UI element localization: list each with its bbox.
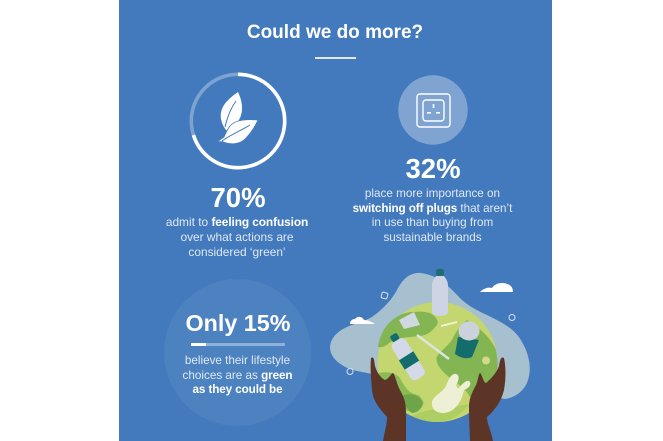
stat: only 15%: Only 15% xyxy=(186,310,290,336)
text: 70% description: admit to feeling confusion xyxy=(166,215,308,229)
title: Could we do more? xyxy=(247,22,423,43)
title underline xyxy=(315,57,356,58)
panel: blue background xyxy=(119,0,552,441)
clouds xyxy=(350,317,375,324)
small outlined dots xyxy=(381,292,388,299)
water bottle xyxy=(432,276,448,316)
illustration: earth with plastic waste held in hands xyxy=(330,269,530,441)
cotton bud xyxy=(441,322,457,326)
plastic bag xyxy=(432,374,470,413)
left hand xyxy=(371,357,406,441)
globe land masses xyxy=(378,312,438,347)
bottle cap xyxy=(482,356,490,364)
text: 15% description: believe their lifestyle xyxy=(185,354,290,367)
progress bar: 15% xyxy=(191,343,285,346)
text: 15% description: choices are as green xyxy=(183,369,292,382)
panel: only 15% circle xyxy=(164,279,311,426)
text: 15% description xyxy=(183,354,292,396)
right hand xyxy=(469,357,506,441)
plastic cup xyxy=(399,312,420,329)
plastic bottle with label xyxy=(386,330,427,382)
text: 15% description: as they could be xyxy=(192,383,282,396)
text: 70% description: over what actions are xyxy=(180,230,294,244)
text: 70% description xyxy=(166,215,308,259)
text: 70% description: considered ‘green’ xyxy=(188,245,286,259)
text: 32% description xyxy=(353,187,512,244)
coffee cup xyxy=(455,337,479,358)
stat: 70%: 70% xyxy=(210,182,266,213)
text: 32% description: place more importance on xyxy=(365,187,500,200)
chart: 70% ring with leaf icon xyxy=(190,72,286,170)
text: 32% description: switching off plugs that aren’t xyxy=(353,202,512,215)
globe xyxy=(378,302,498,422)
text: 32% description: sustainable brands xyxy=(383,231,482,244)
icon: plug socket in circle xyxy=(398,75,468,145)
background blob xyxy=(330,273,530,399)
text: 32% description: in use than buying from xyxy=(372,216,493,229)
straw xyxy=(417,335,449,359)
stat: 32%: 32% xyxy=(405,153,461,184)
